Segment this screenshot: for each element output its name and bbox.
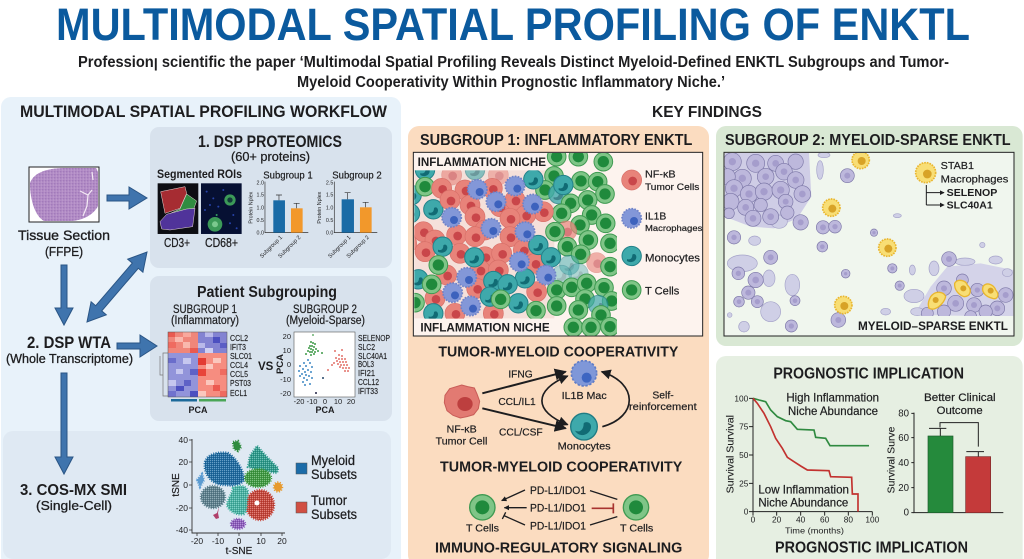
scatter genes: SELENOP [358, 333, 390, 343]
heatmap genes: CCL2 [230, 333, 248, 343]
tSNE plot: -40 [176, 525, 188, 535]
heatmap genes: CCL5 [230, 369, 248, 379]
survival curve chart: High Inflammation [786, 392, 879, 405]
prognostic heading bottom: PROGNOSTIC IMPLICATION [775, 540, 968, 557]
legend: STAB1 macrophages: STAB1 [941, 161, 974, 172]
legend: subsets: Subsets [311, 507, 357, 522]
PCA scatter plot: 10 [283, 346, 291, 355]
diagram: immuno-regulatory signaling: T Cells [466, 524, 499, 535]
survival curve chart: Low Inflammation [758, 483, 849, 496]
bar chart: subgroup 2 proteins: Subgroup 1 [327, 235, 352, 260]
survival curve chart: 75 [739, 422, 749, 432]
bar chart: subgroup 1 proteins: 0.0 [257, 230, 264, 236]
bar chart: subgroup 1 proteins: 1.5 [257, 192, 264, 198]
diagram: tumor-myeloid cooperativity [436, 361, 697, 452]
bar chart: subgroup 2 proteins: 1.0 [326, 205, 333, 211]
scatter genes: IFI21 [358, 368, 375, 378]
heatmap axis label: PCA [188, 405, 208, 415]
VS label: VS [258, 361, 274, 373]
scatter genes: IFIT33 [358, 386, 378, 396]
subtitle: Professionꞁ scientific the paper ‘Multimodal Spatial Profiling Reveals Distinct Myeloid-Defined ENKTL Subgroups and Tumor- [78, 54, 949, 71]
diagram: immuno-regulatory signaling: PD-L1/IDO1 [530, 520, 586, 532]
panel: workflow [1, 97, 401, 559]
cooperativity heading 2: TUMOR-MYELOID COOPERATIVITY [440, 460, 683, 476]
tSNE plot: -10 [212, 536, 224, 546]
prognostic heading top: PROGNOSTIC IMPLICATION [773, 365, 964, 382]
SMI label: 3. COS-MX SMI [20, 482, 127, 499]
PCA scatter plot: 10 [334, 397, 342, 406]
legend: STAB1 macrophages: Macrophages [941, 174, 1008, 185]
bar chart: subgroup 1 proteins: Protein Nplex [248, 191, 254, 224]
legend: STAB1 macrophages [916, 161, 1008, 212]
panel: subgroup 1 content [397, 132, 703, 337]
heatmap genes: SLC01 [230, 351, 252, 361]
diagram: tumor-myeloid cooperativity: IFNG [508, 369, 533, 380]
bar chart: subgroup 1 proteins: Subgroup 2 [277, 235, 302, 260]
subtitle: Myeloid Cooperativity Within Prognostic Inflammatory Niche.’ [297, 74, 725, 91]
subgroup 1 label: (Inflammatory) [171, 315, 239, 327]
survival curve chart: 0 [744, 507, 749, 517]
bar chart: clinical outcome: 80 [898, 408, 909, 419]
legend: cell types [622, 169, 703, 299]
survival curve chart: 25 [739, 478, 749, 488]
panel: subgroup 1 background [408, 126, 709, 559]
workflow heading: MULTIMODAL SPATIAL PROFILING WORKFLOW [20, 102, 388, 121]
diagram: tumor-myeloid cooperativity: CCL/IL1 [498, 397, 536, 408]
CD68 label: CD68+ [205, 236, 238, 250]
legend: cell types: Monocytes [645, 252, 700, 264]
bar chart: subgroup 2 proteins: 0.5 [326, 218, 333, 224]
immuno-regulatory heading: IMMUNO-REGULATORY SIGNALING [435, 540, 682, 556]
bar chart: clinical outcome: 60 [898, 433, 909, 444]
bar chart: subgroup 2 proteins: 2.5 [326, 180, 333, 186]
legend: subsets: Myeloid [311, 453, 355, 468]
arrow: WTA to subgrouping [117, 335, 157, 357]
bar chart: subgroup 1 proteins: 1.0 [257, 205, 264, 211]
myeloid-sparse tissue illustration: MYELOID–SPARSE ENKTL [858, 320, 1008, 333]
heatmap genes: CCL4 [230, 360, 248, 370]
scatter genes [358, 333, 390, 396]
panel: prognostic implication [716, 356, 1023, 559]
subgroup 2 label [286, 304, 365, 327]
segmented ROIs label: Segmented ROIs [157, 167, 242, 181]
WTA label: 2. DSP WTA [27, 333, 111, 352]
proteomics heading: 1. DSP PROTEOMICS [198, 132, 342, 151]
proteomics subheading: (60+ proteins) [231, 150, 310, 164]
survival curve chart: Niche Abundance [758, 497, 848, 510]
legend: cell types: T Cells [645, 286, 679, 298]
survival curve chart: Niche Abundance [788, 405, 878, 418]
tSNE plot: t-SNE [226, 546, 253, 557]
WTA label [6, 333, 133, 366]
diagram: immuno-regulatory signaling: T Cells [620, 524, 653, 535]
subgroup 1 label: SUBGROUP 1 [173, 304, 237, 316]
survival curve chart: Time (months) [785, 525, 844, 535]
scatter genes: BOL3 [358, 359, 374, 369]
legend: subsets [296, 453, 357, 522]
panel: subgroup 2 [716, 126, 1023, 346]
myeloid-sparse tissue illustration [719, 151, 1014, 336]
PCA scatter plot: -10 [307, 397, 317, 406]
PCA scatter plot: -20 [280, 389, 291, 398]
panel: subgroup 1 lower diagrams [435, 345, 697, 556]
arrow: WTA down to SMI [55, 373, 73, 474]
PCA scatter plot: PCA [275, 354, 286, 374]
subgroup 2 heading: SUBGROUP 2: MYELOID-SPARSE ENKTL [725, 132, 1011, 149]
tissue section image [29, 167, 99, 222]
survival curve chart: 100 [734, 393, 749, 403]
diagram: tumor-myeloid cooperativity: CCL/CSF [499, 428, 543, 439]
heatmap genes: PST03 [230, 378, 251, 388]
survival curve chart: 20 [772, 515, 782, 525]
subgroup 2 label: (Myeloid-Sparse) [286, 315, 365, 327]
image: CD3 segmented ROI [158, 183, 198, 234]
legend: STAB1 macrophages: SELENOP [947, 188, 997, 199]
heatmap genes: IFIT3 [230, 342, 246, 352]
bar chart: subgroup 2 proteins: 1.5 [326, 192, 333, 198]
subgroup 1 label [171, 304, 239, 327]
bar chart: subgroup 2 proteins: Protein Nplex [317, 191, 323, 224]
diagram: immuno-regulatory signaling [466, 485, 653, 535]
subtitle [78, 54, 949, 91]
PCA scatter plot [275, 332, 355, 415]
bar chart: clinical outcome: Outcome [937, 405, 983, 417]
arrow: tissue to proteomics [107, 187, 147, 209]
tSNE plot: 0 [237, 536, 242, 546]
bar chart: subgroup 2 proteins: Subgroup 2 [346, 235, 371, 260]
bar chart: clinical outcome: Survival Surve [887, 427, 898, 493]
survival curve chart: 50 [739, 450, 749, 460]
image: CD68 ROI [201, 183, 242, 234]
scatter genes: SLC40A1 [358, 351, 387, 361]
bar chart: subgroup 1 proteins: 2.0 [257, 180, 264, 186]
bar chart: subgroup 1 proteins [248, 170, 313, 260]
PCA scatter plot: -20 [294, 397, 304, 406]
heatmap genes [230, 333, 252, 398]
cooperativity heading 1: TUMOR-MYELOID COOPERATIVITY [438, 345, 679, 361]
SMI label [20, 482, 127, 513]
bar chart: subgroup 1 proteins: Subgroup 1 [259, 235, 284, 260]
WTA label: (Whole Transcriptome) [6, 351, 133, 366]
bar chart: clinical outcome: 20 [898, 483, 909, 494]
arrow: WTA and proteomics double [87, 252, 147, 322]
diagram: immuno-regulatory signaling: PD-L1/IDO1 [530, 485, 586, 497]
tSNE plot: 20 [277, 536, 287, 546]
bar chart: clinical outcome: Better Clinical [924, 392, 996, 404]
survival curve chart: 100 [865, 515, 880, 525]
legend: subsets: Tumor [311, 493, 347, 508]
bar chart: subgroup 1 proteins: Subgroup 1 [263, 170, 313, 181]
legend: cell types: Macrophages [645, 223, 703, 233]
bar chart: clinical outcome: 0 [904, 508, 909, 519]
tSNE plot: 0 [183, 480, 188, 490]
tSNE plot: 10 [256, 536, 266, 546]
diagram: tumor-myeloid cooperativity: Tumor Cell [436, 436, 487, 447]
CD3 label: CD3+ [164, 236, 190, 250]
tSNE plot: tSNE [171, 473, 182, 497]
legend: cell types: NF-κB [645, 169, 676, 180]
legend: cell types: Tumor Cells [645, 182, 700, 192]
tissue label: (FFPE) [45, 245, 83, 259]
survival curve chart [725, 392, 880, 535]
tissue label: Tissue Section [18, 227, 110, 243]
PCA scatter plot: 0 [287, 360, 291, 369]
diagram: tumor-myeloid cooperativity: Self- [652, 390, 674, 401]
arrow: tissue down to WTA [55, 265, 73, 325]
survival curve chart: 60 [820, 515, 830, 525]
diagram: tumor-myeloid cooperativity: Monocytes [558, 441, 611, 452]
diagram: immuno-regulatory signaling: PD-L1/IDO1 [530, 503, 586, 515]
bar chart: clinical outcome [887, 392, 1003, 519]
subgrouping heading: Patient Subgrouping [197, 284, 337, 301]
diagram: tumor-myeloid cooperativity: reinforcement [629, 402, 697, 413]
panel: COS-MX background [3, 431, 391, 559]
PCA scatter plot: 0 [323, 397, 327, 406]
legend: subsets: Subsets [311, 467, 357, 482]
PCA scatter plot: 20 [283, 332, 291, 341]
heatmap [160, 332, 227, 402]
tSNE plot [171, 435, 287, 557]
diagram: tumor-myeloid cooperativity: IL1B Mac [562, 391, 607, 402]
inflammation niche box: INFLAMMATION NICHE [418, 155, 546, 169]
panel: patient subgrouping [150, 276, 392, 421]
heatmap genes: ECL1 [230, 388, 247, 398]
legend: cell types: IL1B [645, 211, 666, 222]
key findings heading: KEY FINDINGS [652, 104, 762, 121]
PCA scatter plot: PCA [315, 405, 335, 415]
survival curve chart: 80 [844, 515, 853, 525]
diagram: tumor-myeloid cooperativity: NF-κB [447, 424, 477, 435]
survival curve chart: Survival Survival [725, 415, 736, 493]
tissue label [18, 227, 110, 259]
tSNE plot: 20 [179, 457, 188, 467]
SMI label: (Single-Cell) [36, 498, 112, 513]
inflammation niche box [397, 147, 703, 337]
subgroup 1 heading: SUBGROUP 1: INFLAMMATORY ENKTL [420, 132, 693, 149]
bar chart: subgroup 2 proteins [317, 170, 382, 260]
survival curve chart: 0 [751, 515, 756, 525]
bar chart: subgroup 2 proteins: 0.0 [326, 230, 333, 236]
bar chart: subgroup 2 proteins: Subgroup 2 [332, 170, 382, 181]
panel: DSP proteomics [150, 127, 392, 268]
bar chart: subgroup 1 proteins: 0.5 [257, 218, 264, 224]
tSNE plot: -20 [176, 503, 188, 513]
survival curve chart: 40 [796, 515, 806, 525]
scatter genes: SLC2 [358, 342, 375, 352]
legend: STAB1 macrophages: SLC40A1 [947, 201, 993, 212]
tSNE plot: 40 [179, 435, 188, 445]
PCA scatter plot: 20 [347, 397, 355, 406]
bar chart: clinical outcome: 40 [898, 458, 909, 469]
subgroup 2 label: SUBGROUP 2 [293, 304, 357, 316]
scatter genes: CCL12 [358, 377, 379, 387]
PCA scatter plot: -10 [280, 375, 291, 384]
tSNE plot: -20 [191, 536, 203, 546]
inflammation niche box: INFLAMMATION NICHE [420, 320, 550, 334]
